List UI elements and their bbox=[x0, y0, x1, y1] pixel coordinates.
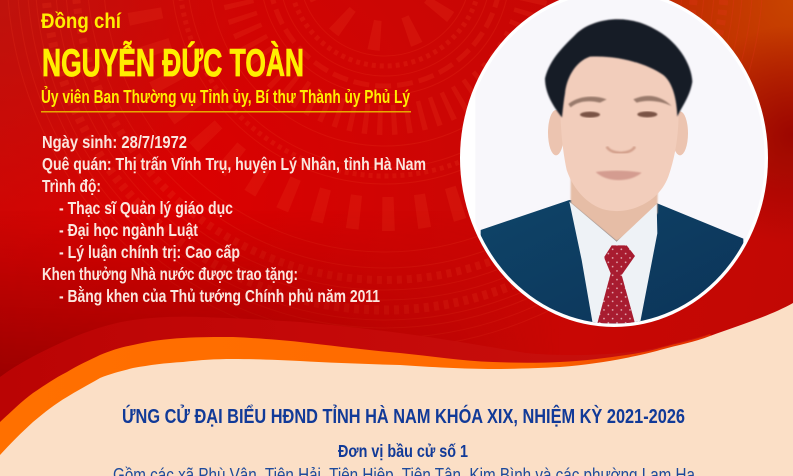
underline bbox=[41, 111, 411, 112]
constituency: Đơn vị bầu cử số 1 bbox=[338, 441, 468, 461]
face bbox=[560, 48, 679, 211]
candidate name: NGUYỄN ĐỨC TOÀN bbox=[42, 41, 304, 85]
left ear bbox=[548, 110, 564, 155]
biography text: Trình độ: bbox=[42, 176, 101, 196]
biography text: Quê quán: Thị trấn Vĩnh Trụ, huyện Lý Nhân, tỉnh Hà Nam bbox=[42, 154, 426, 174]
white oval frame bbox=[460, 0, 768, 327]
hair bbox=[545, 19, 692, 117]
neck bbox=[570, 178, 659, 242]
orange band bbox=[0, 334, 793, 476]
tie bbox=[597, 245, 635, 323]
bronze drum pattern bbox=[7, 0, 763, 348]
greeting: Đồng chí bbox=[41, 9, 122, 33]
left eyebrow bbox=[568, 97, 607, 107]
biography text: - Bằng khen của Thủ tướng Chính phủ năm 2011 bbox=[59, 285, 380, 306]
mouth bbox=[596, 171, 642, 180]
wave band bbox=[0, 317, 793, 476]
biography text bbox=[42, 132, 426, 306]
position: Ủy viên Ban Thường vụ Tỉnh ủy, Bí thư Thành ủy Phủ Lý bbox=[41, 86, 410, 107]
left eye bbox=[580, 112, 600, 118]
portrait photo bbox=[460, 0, 769, 333]
biography text: - Lý luận chính trị: Cao cấp bbox=[59, 242, 240, 262]
suit bbox=[481, 200, 743, 333]
biography text: Khen thưởng Nhà nước được trao tặng: bbox=[42, 264, 298, 284]
biography text: - Thạc sĩ Quản lý giáo dục bbox=[59, 198, 233, 218]
right eyebrow bbox=[633, 96, 672, 106]
biography text: - Đại học ngành Luật bbox=[59, 220, 198, 240]
nose bbox=[607, 147, 635, 153]
shirt bbox=[569, 202, 657, 323]
biography text: Ngày sinh: 28/7/1972 bbox=[42, 132, 187, 152]
dark lower-left shading bbox=[0, 231, 491, 377]
cream lower panel bbox=[0, 303, 793, 476]
right ear bbox=[675, 112, 688, 156]
portrait figure bbox=[480, 18, 744, 324]
right eye bbox=[637, 111, 657, 117]
